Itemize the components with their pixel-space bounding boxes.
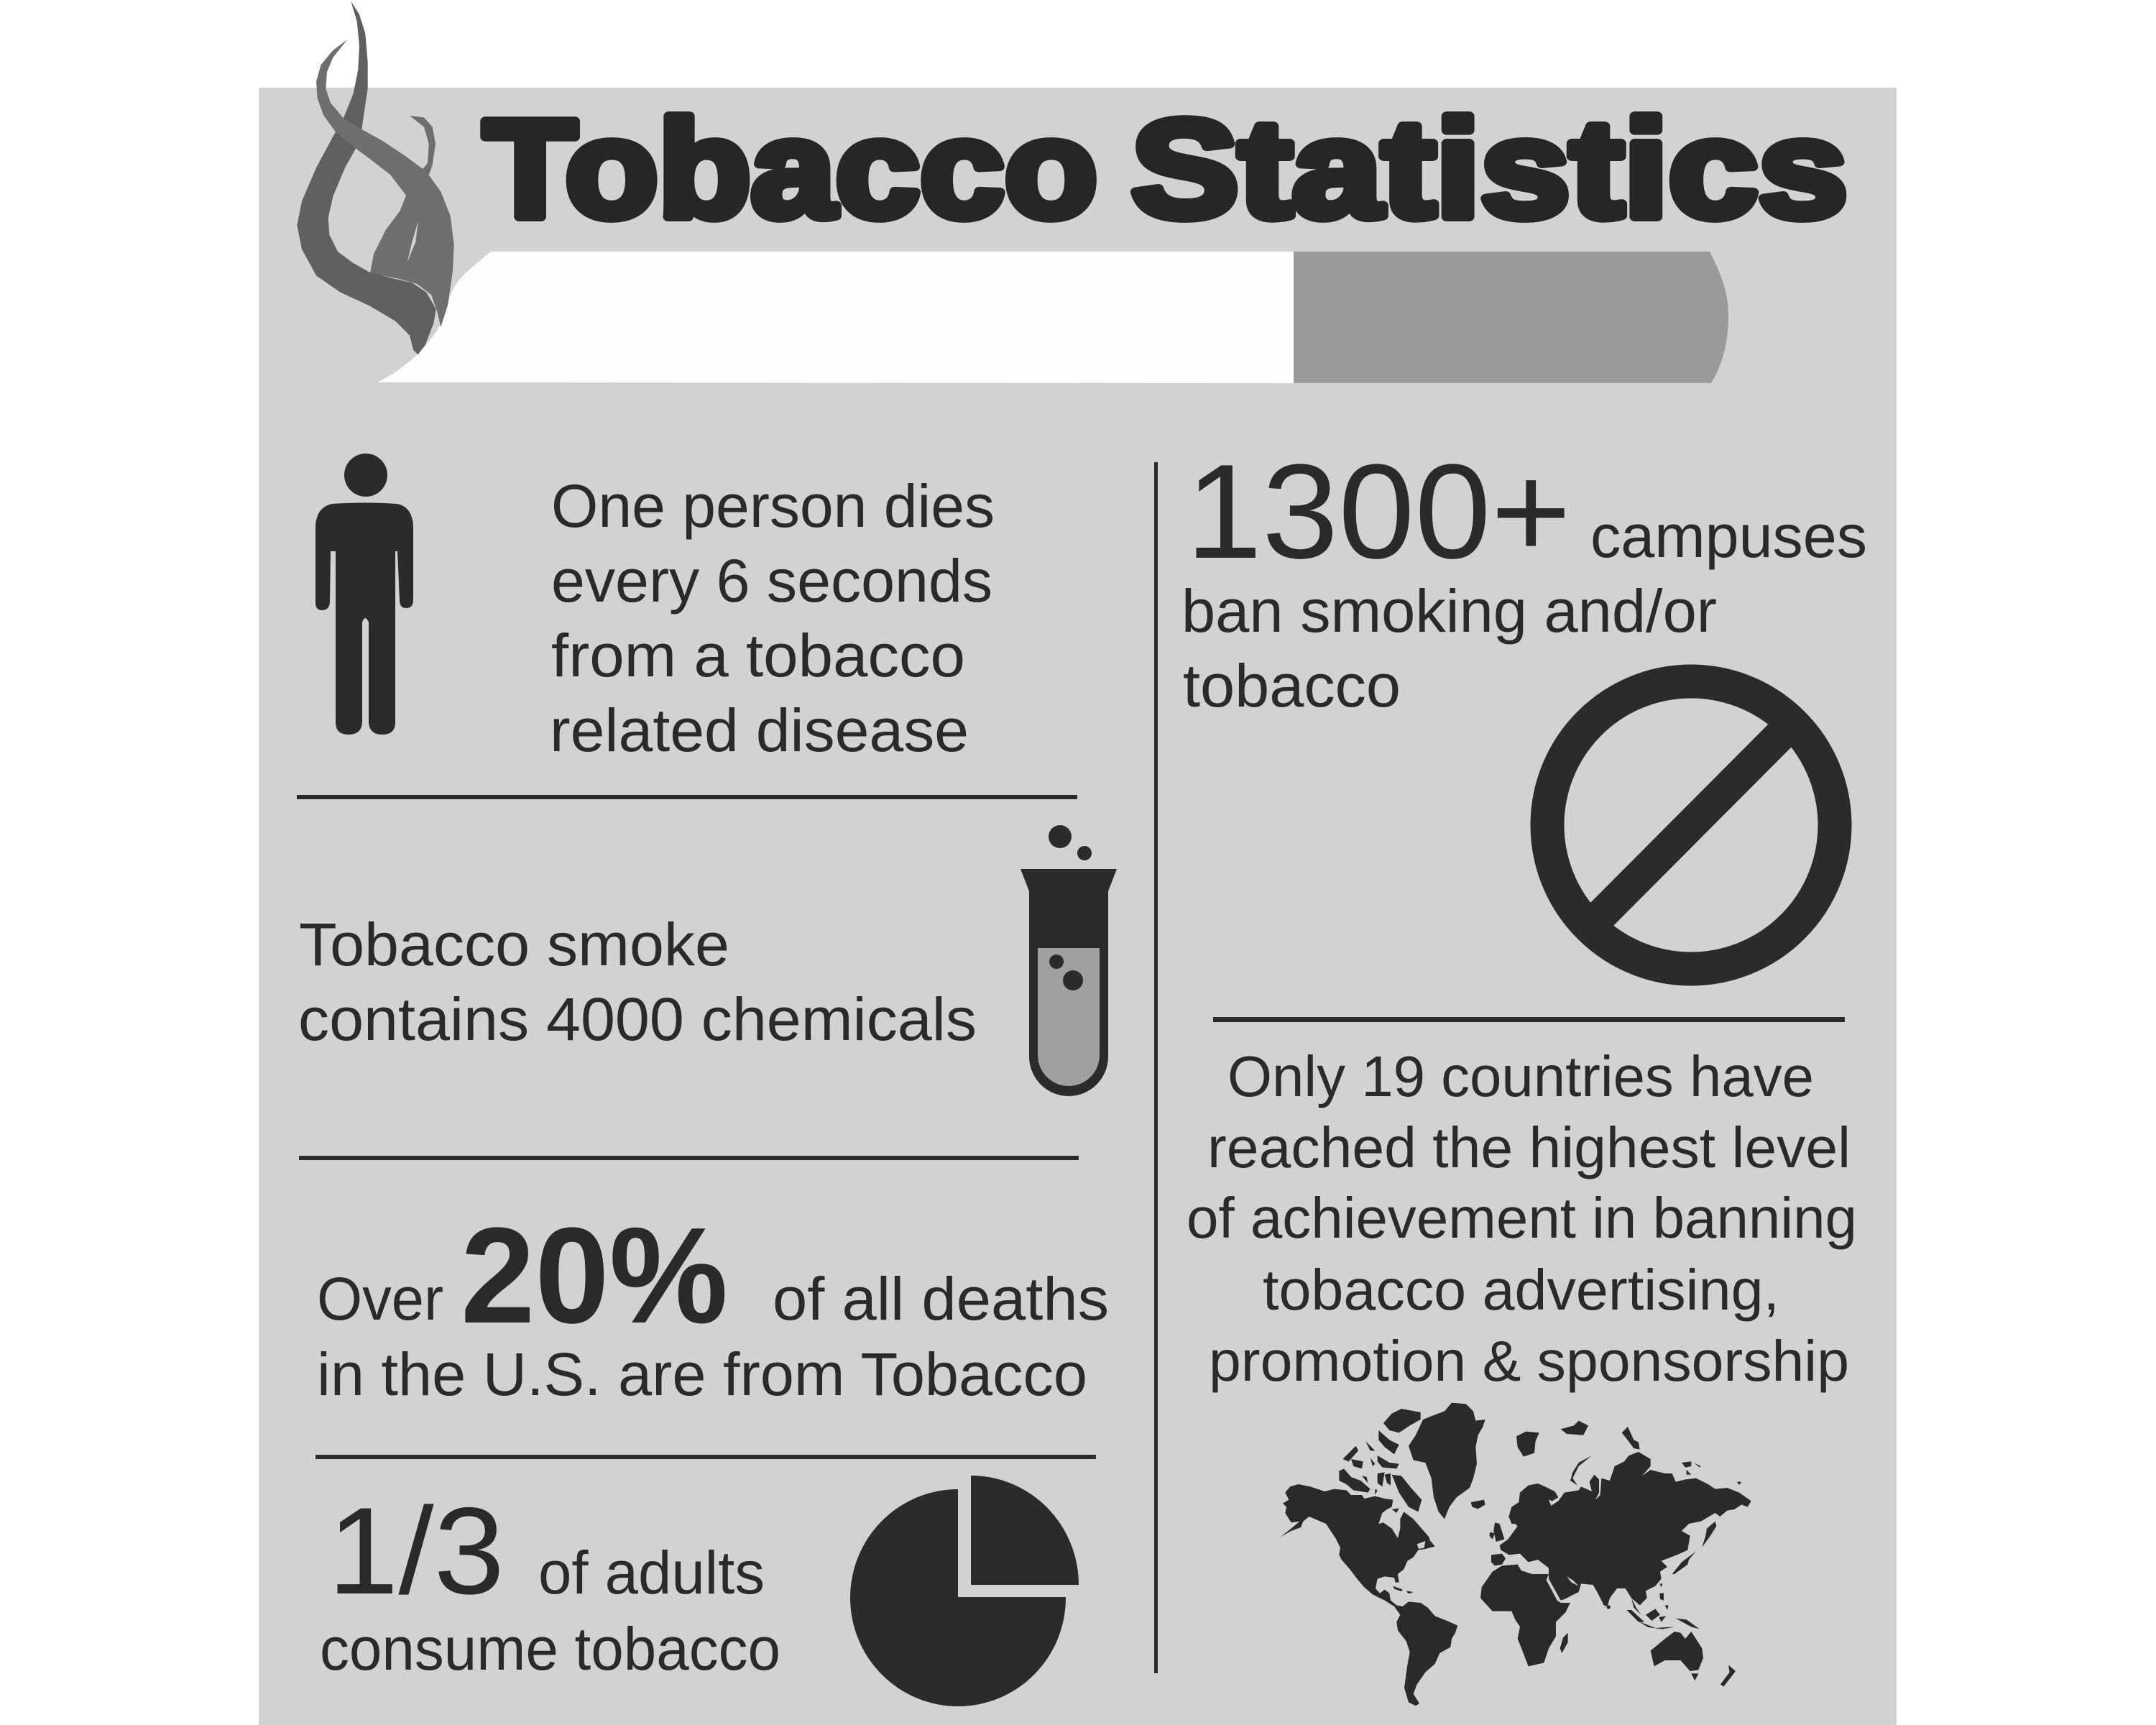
title: Tobacco <box>484 91 1097 246</box>
text: 20 percent of deaths: 20% <box>461 1200 728 1352</box>
icon: smoke <box>297 1 454 354</box>
icon: test tube <box>1021 825 1117 1096</box>
text: only 19 countries: Only 19 countries have <box>1227 1044 1814 1108</box>
text: 1300+ campuses: ban smoking and/or <box>1181 577 1717 645</box>
map: americas and arctic <box>1281 1403 1485 1706</box>
text: 20 percent of deaths: in the U.S. are from Tobacco <box>317 1340 1087 1408</box>
text: 20 percent of deaths: Over <box>317 1265 443 1333</box>
text: one third of adults <box>320 1482 780 1683</box>
panel: grey background <box>259 88 1897 1725</box>
text: chemicals: contains 4000 chemicals <box>298 985 977 1053</box>
text: one third of adults: of adults <box>538 1539 765 1606</box>
text: one person dies <box>550 472 995 764</box>
title: Statistics <box>1131 91 1848 246</box>
map: eurasia africa australia <box>1480 1421 1751 1687</box>
text: 20 percent of deaths <box>317 1200 1109 1408</box>
text: one third of adults: 1/3 <box>328 1482 505 1620</box>
text: 1300+ campuses <box>1181 436 1867 719</box>
icon: world map <box>1281 1403 1751 1706</box>
text: 1300+ campuses: tobacco <box>1183 652 1401 719</box>
title <box>484 91 1848 246</box>
text: 20 percent of deaths: of all deaths <box>773 1265 1109 1333</box>
text: only 19 countries: promotion & sponsorship <box>1209 1329 1849 1393</box>
text: one person dies: One person dies <box>551 472 995 540</box>
text: one person dies: every 6 seconds <box>551 547 992 615</box>
text: one person dies: from a tobacco <box>551 622 965 689</box>
text: 1300+ campuses: 1300+ <box>1186 436 1571 586</box>
text: only 19 countries: of achievement in banning <box>1187 1186 1857 1250</box>
icon: person <box>315 454 413 735</box>
icon: prohibition sign <box>1547 681 1835 969</box>
text: only 19 countries <box>1187 1044 1857 1393</box>
text: one person dies: related disease <box>550 696 969 764</box>
icon: cigarette <box>377 252 1728 383</box>
text: chemicals <box>298 911 977 1053</box>
text: only 19 countries: tobacco advertising, <box>1263 1258 1779 1322</box>
icon: pie chart <box>850 1476 1079 1706</box>
text: 1300+ campuses: campuses <box>1590 502 1867 570</box>
text: chemicals: Tobacco smoke <box>299 911 729 978</box>
text: one third of adults: consume tobacco <box>320 1615 780 1683</box>
text: only 19 countries: reached the highest level <box>1207 1116 1851 1179</box>
